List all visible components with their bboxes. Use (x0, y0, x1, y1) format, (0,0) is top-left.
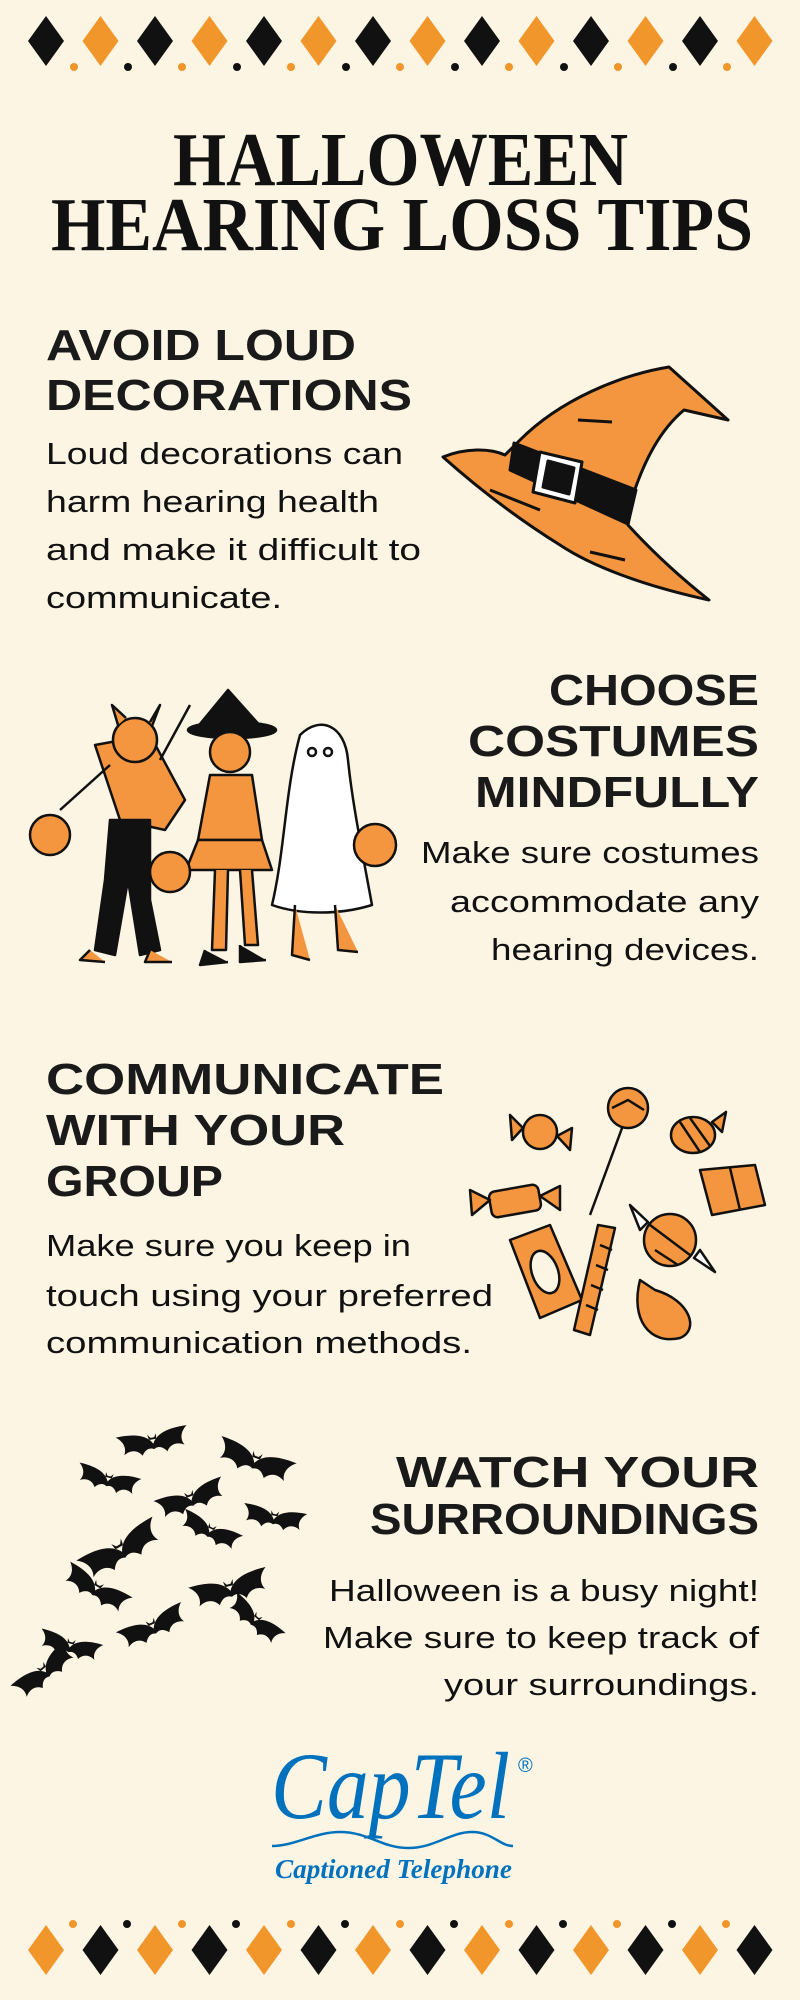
body text 3: touch using your preferred (46, 1278, 493, 1313)
box candy (700, 1165, 765, 1215)
striped candy (671, 1112, 726, 1153)
heading 1: AVOID LOUD (46, 321, 356, 370)
logo: CapTel: Captioned Telephone (275, 1854, 512, 1884)
body text 3: communication methods. (46, 1325, 472, 1360)
body text 2: Make sure costumes (421, 835, 759, 870)
bottom diamond border (28, 1920, 772, 1975)
heading 2 (468, 666, 759, 817)
heading 3 (46, 1055, 444, 1206)
heading 3: GROUP (46, 1157, 223, 1206)
bag candy (637, 1280, 690, 1339)
section 1: avoid loud decorations (46, 321, 421, 615)
body text 2: hearing devices. (491, 932, 759, 967)
heading 4: WATCH YOUR (396, 1448, 759, 1497)
title: HEARING LOSS TIPS (51, 183, 753, 267)
body text 2 (421, 835, 760, 967)
title: HALLOWEEN (173, 118, 628, 202)
heading 2: COSTUMES (468, 717, 759, 766)
heading 2: CHOOSE (549, 666, 759, 715)
devil kid (30, 705, 190, 962)
title (51, 118, 753, 267)
logo: CapTel: ® (518, 1755, 533, 1777)
body text 4: Make sure to keep track of (323, 1620, 759, 1655)
lollipop (590, 1088, 648, 1215)
heading 4 (370, 1448, 759, 1544)
body text 3 (46, 1228, 493, 1360)
body text 1 (46, 436, 421, 615)
heading 1 (46, 321, 412, 420)
section 4: watch your surroundings (323, 1448, 759, 1702)
heading 4: SURROUNDINGS (370, 1495, 759, 1544)
ghost kid (272, 725, 396, 960)
icon: witch hat (443, 367, 728, 600)
body text 4: your surroundings. (444, 1667, 759, 1702)
illustration: bats (10, 1425, 307, 1703)
logo: CapTel: CapTel (271, 1733, 510, 1839)
round wrapped candy (510, 1115, 572, 1150)
body text 4: Halloween is a busy night! (329, 1573, 759, 1608)
heading 1: DECORATIONS (46, 371, 412, 420)
heading 2: MINDFULLY (475, 768, 759, 817)
illustration: trick-or-treat kids (30, 690, 396, 965)
body text 1: Loud decorations can (46, 436, 403, 471)
logo: CapTel (271, 1733, 533, 1884)
section 2: choose costumes mindfully (421, 666, 760, 967)
top diamond border (28, 16, 772, 71)
stick candy (574, 1225, 615, 1335)
heading 3: COMMUNICATE (46, 1055, 444, 1104)
body text 1: communicate. (46, 580, 282, 615)
body text 4 (323, 1573, 759, 1702)
striped round candy (630, 1205, 715, 1272)
section 3: communicate with your group (46, 1055, 493, 1360)
heading 3: WITH YOUR (46, 1106, 345, 1155)
body text 1: and make it difficult to (46, 532, 421, 567)
illustration: candy (470, 1088, 765, 1339)
packet candy (510, 1225, 582, 1318)
body text 3: Make sure you keep in (46, 1228, 411, 1263)
body text 1: harm hearing health (46, 484, 379, 519)
wrapped candy left (470, 1184, 560, 1218)
body text 2: accommodate any (450, 884, 760, 919)
witch kid (150, 690, 276, 965)
